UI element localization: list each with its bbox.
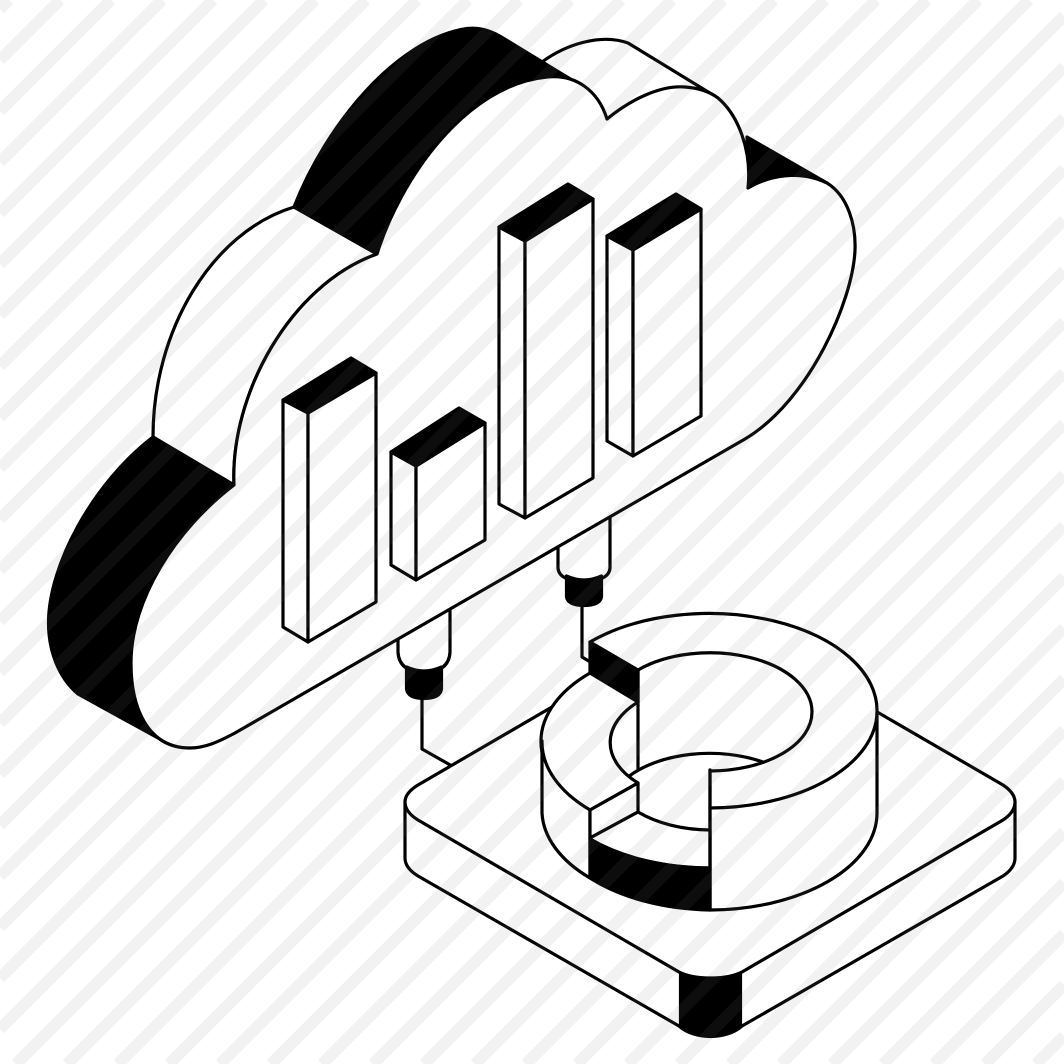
base platform: [405, 615, 1015, 1036]
cloud: black right wedge: [747, 137, 827, 188]
bar 4: [607, 194, 701, 456]
donut: left medium segment: [541, 673, 638, 878]
donut: right large segment: [590, 613, 877, 910]
cloud: back left-upper lobe side: [153, 207, 377, 485]
bar 3: [499, 184, 593, 518]
connector: left plug and wire: [398, 595, 452, 766]
donut chart: [541, 613, 877, 910]
cloud: black lower-left crescent: [48, 437, 234, 738]
cloud: front face: [131, 77, 855, 748]
donut: black front wall: [590, 839, 710, 910]
cloud: back top-right lobe side: [542, 39, 718, 119]
connector: right plug and wire: [558, 500, 610, 663]
donut: small front segment: [590, 770, 710, 910]
cloud: [48, 28, 855, 748]
base: side wall: [405, 802, 1015, 1036]
base: top face: [405, 615, 1015, 978]
bar 1: [283, 358, 376, 642]
cloud: black top crescent: [294, 28, 580, 254]
bar 2: [391, 408, 485, 580]
base: black front corner: [680, 973, 740, 1036]
donut: black cut wall: [590, 642, 638, 702]
